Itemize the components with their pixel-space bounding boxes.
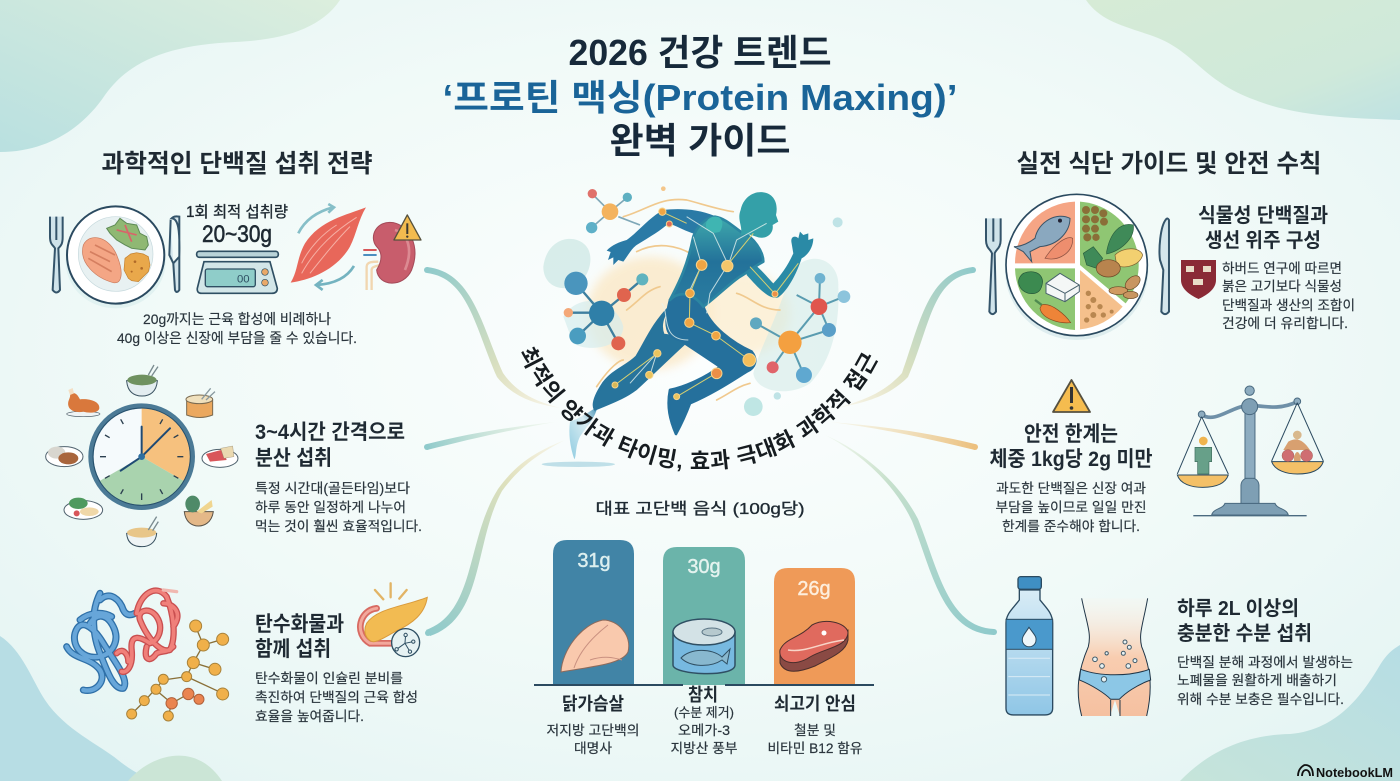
bar: beef tenderloin (774, 568, 855, 685)
panel: high protein foods bar chart (534, 500, 874, 756)
icon: water bottle (1006, 577, 1053, 715)
food: plate lower left (64, 498, 103, 519)
carbohydrates heading: 함께 섭취 (255, 638, 331, 661)
spaced intake heading: 분산 섭취 (255, 447, 332, 470)
food: bowl top (127, 365, 158, 396)
label: tuna: 지방산 풍부 (670, 741, 738, 756)
title (442, 32, 958, 161)
carbohydrates heading (255, 613, 344, 661)
icon: divided plate (986, 194, 1169, 340)
optimal intake text: 1회 최적 섭취량 (186, 203, 288, 221)
icon: warning triangle (1053, 380, 1090, 412)
chart heading: 대표 고단백 음식 (100g당) (596, 500, 804, 518)
label: tuna: 참치 (688, 685, 718, 705)
food: bowl lower right (184, 496, 213, 526)
carbohydrates body: 탄수화물이 인슐린 분비를 (255, 671, 403, 686)
optimal intake description: 40g 이상은 신장에 부담을 줄 수 있습니다. (117, 330, 357, 346)
icon: plate with fork and knife (50, 206, 179, 308)
bar: beef tenderloin: 26g (797, 578, 831, 600)
safety limit body (996, 481, 1146, 534)
carbohydrates body: 효율을 높여줍니다. (255, 709, 364, 724)
panel: hydration (1006, 577, 1353, 716)
hydration body: 단백질 분해 과정에서 발생하는 (1177, 655, 1353, 670)
plant protein body: 단백질과 생산의 조합이 (1222, 298, 1355, 313)
hydration body: 노폐물을 원활하게 배출하기 (1177, 673, 1337, 688)
soft washes (543, 199, 839, 400)
plant protein heading: 식물성 단백질과 (1198, 204, 1328, 227)
safety limit body: 한계를 준수해야 합니다. (1002, 519, 1140, 534)
food: plate left (46, 447, 83, 467)
panel: with carbohydrates (67, 583, 427, 724)
label: beef tenderloin: 쇠고기 안심 (774, 694, 856, 714)
label: beef tenderloin: 철분 및 (794, 723, 836, 738)
label: beef tenderloin (768, 694, 862, 756)
icon: kitchen scale (197, 251, 278, 293)
safety limit body: 과도한 단백질은 신장 여과 (996, 481, 1146, 496)
plant protein heading: 생선 위주 구성 (1205, 229, 1321, 252)
panel: spaced intake (46, 365, 422, 547)
optimal intake description: 20g까지는 근육 합성에 비례하나 (143, 311, 331, 327)
bar: tuna: 30g (687, 556, 721, 578)
connector curves (424, 267, 997, 636)
icon: kitchen scale: 00 (237, 274, 250, 286)
spaced intake heading: 3~4시간 간격으로 (255, 421, 405, 444)
icon: balance scale (1177, 386, 1323, 516)
icon: protein and amino acids (67, 590, 229, 721)
plant protein body: 하버드 연구에 따르면 (1222, 261, 1342, 276)
label: chicken breast: 닭가슴살 (562, 694, 624, 714)
spaced intake body (255, 481, 422, 534)
title: ‘프로틴 맥싱(Protein Maxing)’ (442, 77, 958, 118)
label: chicken breast (546, 694, 640, 756)
spaced intake body: 하루 동안 일정하게 나누어 (255, 500, 406, 515)
label: chicken breast: 저지방 고단백의 (546, 723, 640, 738)
label: tuna (670, 685, 738, 756)
chart axis (534, 684, 874, 686)
icon: molecule top left (586, 186, 843, 416)
panel: optimal intake (50, 203, 421, 346)
spaced intake body: 먹는 것이 훨씬 효율적입니다. (255, 519, 422, 534)
bar: chicken breast: 31g (577, 550, 611, 572)
carbohydrates body: 촉진하여 단백질의 근육 합성 (255, 690, 418, 705)
plant protein body (1222, 261, 1355, 331)
safety limit body: 부담을 높이므로 일일 만진 (996, 500, 1146, 515)
icon: molecule left (564, 272, 648, 350)
safety limit heading (990, 423, 1152, 471)
icon: harvard shield (1181, 260, 1216, 299)
safety limit heading: 체중 1kg당 2g 미만 (990, 448, 1152, 471)
heading: left section: 과학적인 단백질 섭취 전략 (102, 150, 372, 178)
heading: right section: 실전 식단 가이드 및 안전 수칙 (1016, 150, 1322, 178)
spaced intake heading (255, 421, 405, 470)
optimal intake text: 20~30g (202, 221, 272, 248)
bar: chicken breast (553, 540, 634, 685)
watermark: NotebookLM: NotebookLM (1316, 766, 1393, 780)
carbohydrates heading: 탄수화물과 (255, 613, 344, 636)
food: can (186, 388, 215, 417)
hydration heading: 하루 2L 이상의 (1177, 597, 1299, 620)
icon: molecule right (750, 273, 850, 383)
optimal intake description (117, 311, 357, 346)
title: 2026 건강 트렌드 (568, 32, 832, 73)
hydration heading (1177, 597, 1312, 645)
optimal intake text (186, 203, 288, 248)
hydration body: 위해 수분 보충은 필수입니다. (1177, 692, 1344, 707)
plant protein heading (1198, 204, 1328, 252)
food: chicken leg (67, 388, 100, 417)
icon: clock with food (46, 365, 238, 547)
panel: plant protein and fish (986, 194, 1355, 340)
icon: muscle and kidney (291, 204, 421, 290)
safety limit heading: 안전 한계는 (1024, 423, 1118, 446)
hydration body (1177, 655, 1353, 707)
food: plate right (202, 446, 238, 467)
curved caption: 최적의 양가과 타이밍, 효과 극대화 과학적 접근 (521, 346, 878, 472)
icon: running figure (542, 192, 813, 467)
center illustration: runner with molecules (521, 186, 878, 472)
panel: safety limit (990, 380, 1323, 534)
plant protein body: 붉은 고기보다 식물성 (1222, 279, 1342, 294)
spaced intake body: 특정 시간대(골든타임)보다 (255, 481, 411, 496)
icon: torso with kidneys (1078, 598, 1151, 716)
label: beef tenderloin: 비타민 B12 함유 (768, 741, 862, 756)
hydration heading: 충분한 수분 섭취 (1177, 622, 1312, 645)
label: tuna: (수분 제거) (674, 705, 734, 720)
label: tuna: 오메가-3 (678, 723, 730, 738)
title: 완벽 가이드 (610, 120, 790, 161)
icon: pancreas (360, 583, 427, 657)
bar: tuna (663, 547, 745, 685)
plant protein body: 건강에 더 유리합니다. (1222, 316, 1348, 331)
carbohydrates body (255, 671, 418, 724)
label: chicken breast: 대명사 (574, 741, 613, 756)
food: bowl bottom (127, 517, 158, 547)
